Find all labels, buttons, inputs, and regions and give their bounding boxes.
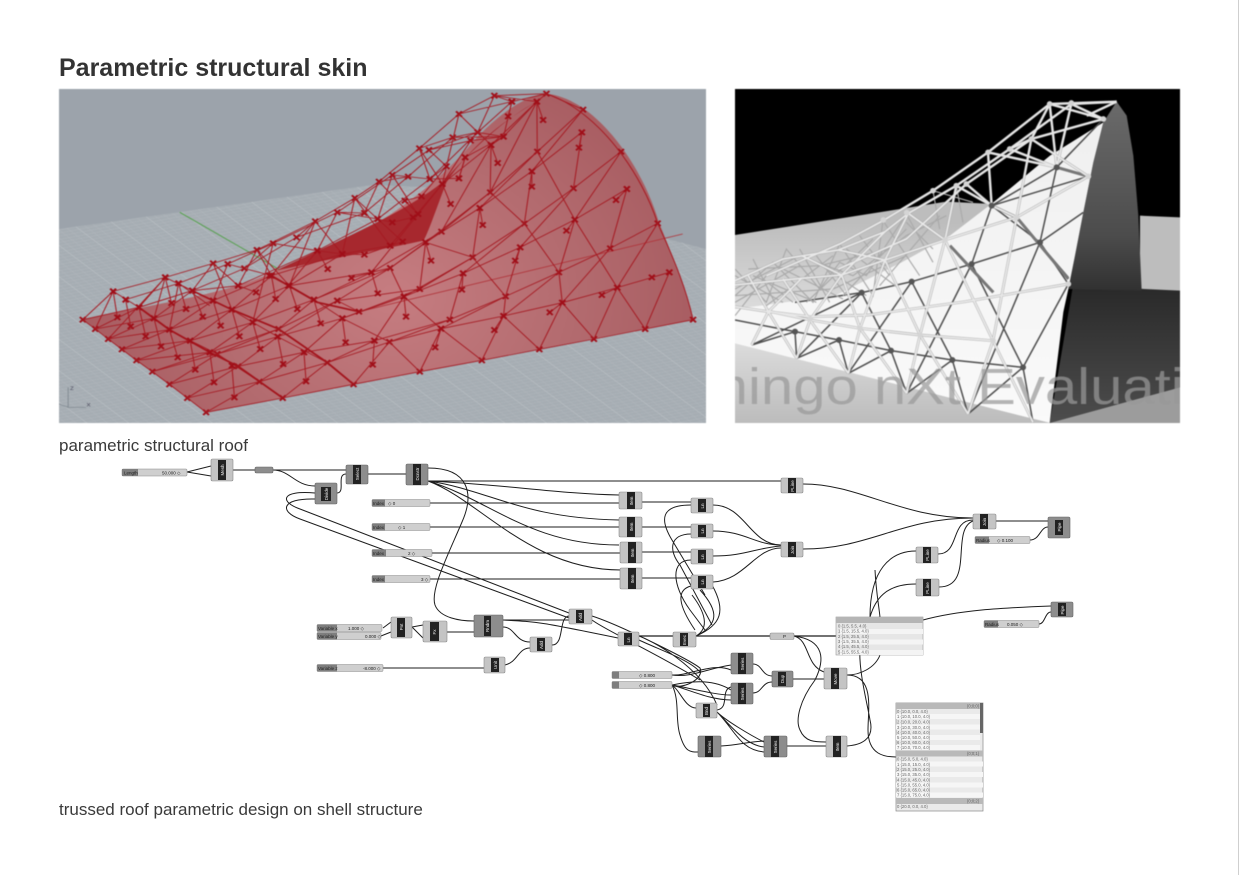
components: polyline, join, add, pipe: Pipe — [1060, 605, 1065, 615]
sliders: pair: ◇ 0.800 — [639, 683, 655, 688]
components: vector row: Add — [578, 613, 583, 621]
sliders: radius: Radius — [976, 538, 991, 543]
components: polyline, join, add, pipe: PLine — [925, 582, 930, 594]
slider: length: Length — [124, 470, 138, 476]
dark thick shadow chords — [950, 167, 1088, 292]
components: line and vector: P — [783, 634, 786, 639]
dark lower struts — [735, 119, 1103, 422]
components: polyline, join, add, pipe — [781, 478, 1073, 617]
shell surface — [83, 94, 693, 412]
sliders: index: Index — [373, 577, 385, 582]
arch shadow side — [1068, 102, 1142, 291]
lower node markers — [113, 102, 669, 397]
panel: large point list: 3 {15.0, 35.0, 4.0} — [897, 772, 931, 777]
sliders: pair — [612, 672, 672, 688]
component: select: Select — [355, 467, 360, 480]
panel: large point list: 4 {15.0, 45.0, 4.0} — [897, 778, 931, 782]
panel: large point list: 4 {10.0, 40.0, 4.0} — [897, 730, 931, 735]
panel: small point list: 0 {1.5, 5.5, 4.0} — [838, 624, 867, 628]
foreground floor — [735, 341, 1050, 423]
components: vector row: Add — [539, 641, 544, 649]
sliders: variables: -8.000 ◇ — [363, 666, 381, 671]
slider: length: 50.000 ◇ — [162, 470, 181, 476]
slider: length — [122, 469, 187, 476]
red axis — [359, 234, 683, 312]
panel: large point list: 1 {10.0, 10.0, 4.0} — [897, 714, 931, 719]
sliders: index: ◇ 0 — [388, 501, 396, 506]
components: series and move: Move — [833, 673, 838, 685]
component: mesh: Mesh — [220, 464, 225, 476]
panel: large point list: {0;0;0} — [967, 704, 980, 708]
components: item column: Item — [630, 574, 635, 583]
light upper struts outline — [735, 102, 1117, 422]
components: vector row: Fx — [432, 629, 437, 634]
panel: large point list: {0;0;2} — [967, 798, 980, 804]
components: series and move: Dup — [780, 674, 785, 683]
components: series and move: Series — [773, 740, 778, 753]
sliders: index: 3 ◇ — [421, 577, 429, 582]
sliders: radius: Radius — [985, 622, 1000, 627]
components: item column: Item — [629, 522, 634, 531]
sliders: variables: Variable y — [318, 634, 338, 639]
panel: small point list: 3 {1.5, 35.5, 4.0} — [838, 639, 869, 644]
component: divide — [315, 483, 337, 504]
inner fold — [276, 102, 537, 271]
panel: large point list: 6 {10.0, 60.0, 4.0} — [897, 740, 931, 745]
right lower floor — [1050, 387, 1180, 423]
component: mesh — [211, 459, 233, 481]
components: series and move: Series — [707, 740, 712, 753]
sliders: radius: ◇ 0.100 — [997, 538, 1013, 543]
black background — [735, 89, 1180, 423]
diagonal members — [83, 94, 693, 412]
sliders: index: ◇ 1 — [398, 525, 406, 530]
sliders: index: Index — [373, 501, 385, 506]
light upper struts — [735, 102, 1117, 422]
cast shadow — [1050, 286, 1180, 423]
components: line column: Ln — [700, 554, 705, 560]
panel: red parametric roof model — [58, 88, 706, 424]
sliders: pair: ◇ 0.800 — [639, 673, 655, 678]
components: vector row: Pnt — [399, 623, 404, 630]
title: Parametric structural skin — [59, 54, 367, 82]
component: select — [346, 465, 368, 484]
panel: large point list: 5 {15.0, 55.0, 4.0} — [897, 782, 931, 788]
panel: small point list: 5 {1.5, 55.5, 4.0} — [838, 650, 869, 654]
components: vector row: Rndm — [485, 620, 490, 632]
components: line and vector: Ln — [626, 637, 631, 643]
panel: large point list: 0 {15.0, 5.0, 4.0} — [897, 756, 928, 762]
sliders: variables: Variable z — [318, 666, 338, 671]
panel: large point list: 6 {15.0, 65.0, 4.0} — [897, 788, 931, 792]
sliders: index — [372, 500, 432, 582]
panel: large point list: 2 {10.0, 20.0, 4.0} — [897, 720, 931, 724]
param — [255, 467, 273, 473]
components: line and vector: Evec — [682, 634, 687, 645]
components: series and move — [696, 653, 847, 757]
upper chord truss — [83, 94, 583, 339]
panel: large point list: 7 {10.0, 70.0, 4.0} — [897, 745, 931, 750]
world axes — [59, 384, 91, 408]
background — [59, 89, 706, 423]
components: series and move: Series — [740, 657, 745, 670]
components: line column: Ln — [700, 579, 705, 585]
components: item column: Item — [630, 548, 635, 557]
sliders: variables: Variable x — [318, 626, 338, 631]
caption: trussed roof: trussed roof parametric design on shell structure — [59, 800, 423, 819]
panel: large point list: 2 {15.0, 25.0, 4.0} — [897, 767, 931, 772]
component: deconstruct — [406, 464, 428, 485]
panel: small point list: 1 {1.5, 15.5, 4.0} — [838, 628, 869, 634]
components: series and move: Bnd — [704, 707, 709, 715]
components: item column — [619, 492, 642, 589]
panel: large point list: 1 {15.0, 15.0, 4.0} — [897, 762, 931, 767]
panel: rendered white truss shell — [734, 88, 1181, 424]
ground grid — [59, 185, 706, 423]
components: line column: Ln — [700, 503, 705, 509]
panel: large point list: 0 {20.0, 0.0, 4.0} — [897, 804, 928, 809]
dense far truss — [735, 186, 973, 316]
back floor — [735, 202, 993, 312]
front thick chords — [139, 276, 359, 398]
components: line and vector — [618, 632, 794, 647]
world axes: z — [70, 384, 74, 392]
sliders: radius — [975, 536, 1039, 628]
components: vector row — [391, 609, 592, 673]
white shell face — [735, 102, 1117, 423]
panel: large point list: 7 {15.0, 75.0, 4.0} — [897, 792, 931, 798]
surface rows — [83, 102, 693, 412]
sliders: variables — [317, 624, 383, 672]
sliders: variables: 1.000 ◇ — [348, 626, 365, 631]
components: polyline, join, add, pipe: Join — [982, 517, 987, 526]
sliders: variables: 0.000 ◇ — [365, 634, 382, 639]
components: item column: Item — [629, 496, 634, 505]
panel: large point list: 5 {10.0, 50.0, 4.0} — [897, 735, 931, 740]
panel: large point list: 0 {10.0, 0.0, 4.0} — [897, 709, 928, 714]
panel: large point list: 3 {10.0, 30.0, 4.0} — [897, 725, 931, 730]
world axes: x — [86, 400, 91, 408]
panel: small point list: 2 {1.5, 25.5, 4.0} — [838, 634, 869, 639]
page edge line — [1238, 0, 1239, 875]
components: polyline, join, add, pipe: PLine — [925, 549, 930, 561]
components: polyline, join, add, pipe: Join — [790, 545, 795, 554]
right floor — [1140, 216, 1180, 292]
panel: large point list: {0;0;1} — [967, 751, 980, 756]
components: series and move: Series — [740, 687, 745, 700]
component: deconstruct: Dcnstr — [415, 467, 420, 481]
components: vector row: Unit — [493, 660, 498, 669]
sliders: index: Index — [373, 525, 385, 530]
components: line column — [691, 498, 713, 589]
components: series and move: Item — [835, 742, 840, 751]
caption: parametric structural roof: parametric structural roof — [59, 436, 248, 455]
panel: large point list — [896, 703, 983, 811]
sliders: index: 2 ◇ — [408, 551, 416, 556]
sliders: index: Index — [373, 551, 385, 556]
component: divide: Divide — [324, 487, 329, 500]
panel: small point list — [836, 617, 923, 655]
green axis — [180, 212, 313, 289]
sliders: radius: 0.050 ◇ — [1007, 622, 1024, 627]
wires — [187, 466, 1051, 757]
components: polyline, join, add, pipe: Pipe — [1057, 522, 1062, 532]
joints — [810, 103, 1103, 341]
panel: small point list: 4 {1.5, 45.5, 4.0} — [838, 644, 869, 649]
components: line column: Ln — [700, 528, 705, 534]
components: polyline, join, add, pipe: PLine — [790, 480, 795, 492]
